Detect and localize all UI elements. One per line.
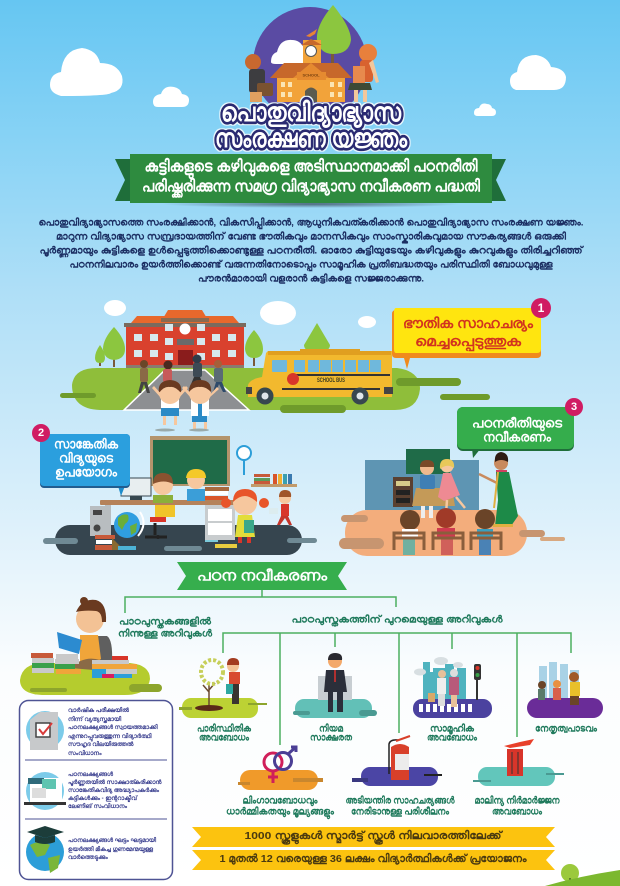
section heading ribbon: പഠന നവീകരണം (197, 568, 328, 584)
label: knowledge from textbooks (118, 614, 214, 640)
text: assessment: സംവിധാനം (68, 750, 102, 757)
icon: checklist (26, 711, 64, 750)
text: technology: ലേണിങ് സംവിധാനം (68, 803, 128, 810)
wall clock (237, 446, 251, 475)
main title (215, 97, 408, 153)
text: technology (68, 771, 163, 810)
peach ground (339, 510, 565, 556)
callout 2: 2 (38, 427, 44, 439)
text: quality (68, 837, 157, 861)
classroom wall (365, 460, 479, 510)
text: assessment: പഠനലക്ഷ്യങ്ങൾ സ്വായത്തമാക്കി (68, 724, 158, 731)
green ground (60, 368, 490, 413)
item: social awareness (413, 657, 492, 744)
school bus: SCHOOL BUS (317, 378, 345, 384)
text: quality: വാർത്തെടുക്കും (68, 854, 108, 861)
text: quality: പഠനലക്ഷ്യങ്ങൾ ഘട്ടം ഘട്ടമായി (68, 837, 157, 844)
item: emergency training (346, 736, 456, 818)
subtitle ribbon (115, 154, 506, 203)
text: assessment: വാർഷിക പരീക്ഷയിൽ (68, 707, 129, 714)
item: waste management: മാലിന്യ നിർമാർജ്ജന (474, 794, 561, 808)
text: quality: ഉയർത്തി മികച്ച ഗുണമേന്മയുള്ള (68, 846, 154, 853)
item: leadership (527, 662, 603, 736)
text: assessment: എന്നുറപ്പുവരുത്തുന്ന വിദ്യാർത്ഥി (68, 733, 152, 742)
label: knowledge from textbooks: പാഠപുസ്തകങ്ങളിൽ (119, 614, 213, 629)
boy with satchel (245, 54, 273, 102)
callout 2: ഉപയോഗം (55, 464, 118, 480)
callout 2: വിദ്യയുടെ (59, 450, 114, 467)
bookcase (393, 477, 413, 507)
intro paragraph: പൊതുവിദ്യാഭ്യാസത്തെ സംരക്ഷിക്കാൻ, വികസിപ്പിക്കാൻ, ആധുനികവത്കരിക്കാൻ പൊതുവിദ്യാഭ്യാസ സംരക്ഷണ യജ്ഞം. (38, 216, 584, 230)
boy reading (269, 490, 292, 525)
dark ground (43, 525, 317, 555)
callout 3 (457, 398, 583, 458)
desk (412, 488, 455, 506)
text: assessment (68, 707, 158, 757)
item: emergency training: അടിയന്തിര സാഹചര്യങ്ങൾ (346, 794, 456, 808)
callout 2 (32, 424, 130, 496)
item: waste management: അവബോധം (492, 806, 543, 818)
text: assessment: നിന്ന് വ്യത്യസ്തമായി (68, 716, 122, 724)
illustration: boy reading on books (20, 597, 162, 695)
students walking (138, 354, 226, 393)
intro paragraph: മാറുന്ന വിദ്യാഭ്യാസ സമ്പ്രദായത്തിന് വേണ്ട ഭൗതികവും മാനസികവും സാംസ്കാരികവുമായ സൗകര്യങ്ങൾ ഒരുക്കി (56, 230, 567, 244)
text: assessment: സൗഹൃദ വിലയിരുത്തൽ (68, 741, 134, 748)
blackboard (406, 449, 450, 474)
child at desk (145, 473, 175, 539)
section heading ribbon (177, 562, 347, 590)
callout 3: 3 (571, 401, 577, 413)
callout 2: സാങ്കേതിക (54, 436, 119, 452)
stack of books on desk (204, 487, 229, 500)
school bus (246, 349, 393, 404)
callout 1: ഭൗതിക സാഹചര്യം (403, 315, 534, 333)
banner: 36 lakh students (192, 850, 555, 870)
main title: പൊതുവിദ്യാഭ്യാസ (221, 97, 402, 129)
seated children (394, 508, 501, 555)
main title: സംരക്ഷണ യജ്ഞം (215, 123, 408, 153)
banner: 1000 schools: 1000 സ്കൂളുകൾ സ്മാർട്ട് സ്കൂൾ നിലവാരത്തിലേക്ക് (244, 829, 504, 846)
globe and books (95, 512, 144, 550)
callout 3: നവീകരണം (483, 430, 552, 444)
subtitle ribbon: കുട്ടികളുടെ കഴിവുകളെ അടിസ്ഥാനമാക്കി പഠനരീതി (144, 158, 478, 180)
intro paragraph: പൂർണ്ണമായും കുട്ടികളെ ഉൾപ്പെടുത്തിക്കൊണ്ടുള്ള പഠനരീതി. ഓരോ കുട്ടിയുടേയും കഴിവുകളും കുറവുകളും തിരിച്ചറിഞ്ഞ് (40, 244, 585, 259)
school building: SCHOOL (302, 72, 320, 78)
intro paragraph (38, 216, 585, 284)
item: environmental awareness: അവബോധം (199, 732, 250, 744)
standing girl (438, 459, 465, 514)
cloud behind school (271, 40, 306, 64)
banner: 36 lakh students: 1 മുതൽ 12 വരെയുള്ള 36 ലക്ഷം വിദ്യാർത്ഥികൾക്ക് പ്രയോജനം (220, 852, 527, 866)
book shelf (251, 474, 297, 487)
girl with backpack (348, 44, 379, 102)
callout 3: പഠനരീതിയുടെ (472, 416, 563, 432)
header emblem (245, 5, 379, 121)
computer (90, 478, 151, 536)
intro paragraph: പഠനനിലവാരം ഉയർത്തിക്കൊണ്ട് വരുന്നതിനോടൊപ്പം സാമൂഹിക പ്രതിബദ്ധതയും പരിസ്ഥിതി ബോധവുമുള്ള (70, 258, 553, 272)
item: gender awareness (226, 747, 335, 820)
subtitle ribbon: പരിഷ്ക്കരിക്കുന്ന സമഗ്ര വിദ്യാഭ്യാസ നവീകരണ പദ്ധതി (142, 178, 480, 199)
callout 1 (392, 298, 551, 369)
item: legal literacy: നിയമ (319, 722, 344, 734)
clouds (104, 300, 376, 328)
child with cap (186, 469, 206, 501)
desk (100, 500, 235, 540)
item: gender awareness: ലിംഗാവബോധവും (242, 794, 318, 807)
item: leadership: നേതൃത്വപാടവം (535, 724, 598, 736)
red school (124, 310, 246, 368)
item: legal literacy (293, 653, 377, 744)
item: social awareness: സാമൂഹിക (430, 722, 475, 736)
road (124, 370, 249, 410)
bottom right hill and tree (545, 864, 620, 886)
panel: features box (20, 700, 172, 880)
two kids jumping (152, 380, 219, 432)
label: knowledge beyond textbooks: പാഠപുസ്തകത്തിന് പുറമെയുള്ള അറിവുകൾ (292, 612, 504, 627)
callout 1: മെച്ചപ്പെടുത്തുക (415, 333, 522, 352)
panel: physical facilities (60, 298, 551, 432)
panel: teaching method renewal (339, 398, 583, 556)
item: environmental awareness: പാരിസ്ഥിതിക (197, 722, 252, 734)
text: technology: പഠനലക്ഷ്യങ്ങൾ (68, 771, 114, 778)
subtitle shadow (161, 200, 461, 208)
tree connector lines (125, 590, 571, 745)
panel: use of technology (32, 424, 317, 555)
trees (95, 323, 330, 367)
icon: globe with graduation cap (26, 826, 64, 873)
purple circle (253, 7, 367, 121)
item: gender awareness: ധാർമ്മികതയും മൂല്യങ്ങളും (226, 804, 335, 820)
intro paragraph: പൗരൻമാരായി വളരാൻ കുട്ടികളെ സജ്ജരാക്കുന്നു. (198, 272, 424, 284)
label: knowledge from textbooks: നിന്നുള്ള അറിവുകൾ (118, 626, 214, 640)
item: legal literacy: സാക്ഷരത (310, 732, 353, 744)
item: emergency training: നേരിടാനുള്ള പരിശീലനം (351, 804, 450, 818)
text: technology: കുട്ടികൾക്കും - ഇന്ററാക്ടീവ് (68, 795, 139, 803)
chalkboard (150, 436, 230, 486)
text: technology: പൂർണ്ണതയിൽ സാക്ഷാത്കരിക്കാൻ (68, 779, 163, 787)
tree (317, 5, 351, 65)
icon: laptop (24, 772, 66, 810)
teacher in saree (479, 452, 518, 527)
text: technology: സാങ്കേതികവിദ്യ അദ്ധ്യാപകർക്കും (68, 787, 160, 794)
standing boy (420, 460, 435, 518)
clouds (50, 48, 566, 116)
red-haired girl (221, 489, 269, 543)
item: waste management (473, 739, 564, 818)
item: environmental awareness (179, 658, 267, 744)
callout 1: 1 (538, 301, 545, 315)
banner: 1000 schools (192, 827, 555, 847)
item: social awareness: അവബോധം (427, 732, 478, 744)
